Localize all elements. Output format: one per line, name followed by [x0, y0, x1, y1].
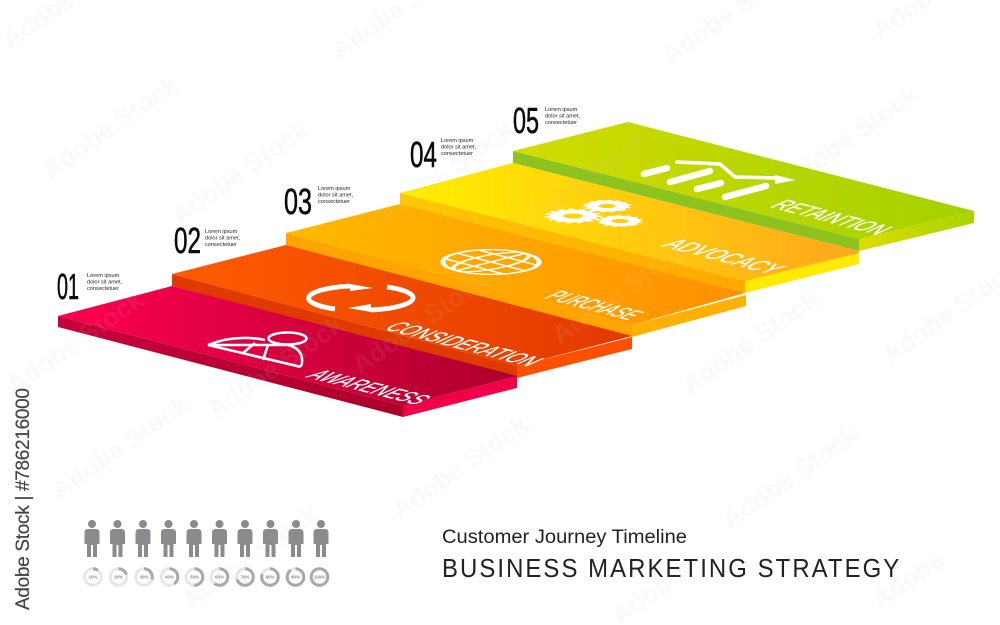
- label: retention: RETAINTION: [763, 197, 900, 238]
- label: purchase: PURCHASE: [537, 288, 651, 323]
- number 01 with note: dolor sit amet,: [87, 280, 123, 286]
- number 05 with note: 05: [513, 100, 539, 141]
- watermark pattern: Adobe Stock: [176, 499, 324, 615]
- watermark pattern: Adobe Stock: [46, 389, 194, 505]
- stock id vertical caption: Adobe Stock | #786216000: [13, 388, 34, 610]
- percentage donut row: 100%: [314, 575, 325, 580]
- percentage donut row: 90%: [291, 575, 300, 580]
- watermark pattern: Adobe Stock: [346, 264, 494, 380]
- percentage donut row: 70%: [240, 575, 250, 580]
- number 03 with note: 03: [284, 181, 312, 222]
- watermark pattern: Adobe Stock: [546, 234, 694, 350]
- icon: rising chart: [644, 162, 796, 197]
- number 05 with note: [513, 100, 581, 141]
- percentage donut row: 40%: [165, 575, 174, 580]
- number 02 with note: 02: [174, 220, 201, 261]
- step 4: advocacy: [400, 163, 859, 293]
- watermark pattern: Adobe Stock: [166, 114, 314, 230]
- watermark pattern: Adobe: [866, 544, 950, 615]
- icon: cycle arrows: [309, 284, 413, 312]
- label: consideration: CONSIDERATION: [377, 319, 551, 369]
- percentage donut row: 80%: [265, 575, 275, 580]
- number 04 with note: dolor sit amet,: [441, 144, 477, 150]
- watermark pattern: Adobe Stock: [201, 309, 349, 425]
- number 01 with note: [57, 266, 123, 307]
- percentage donut row: 30%: [139, 575, 149, 580]
- number 01 with note: Lorem ipsum: [87, 273, 120, 279]
- number 02 with note: consectetuer: [205, 242, 237, 248]
- subtitle: Customer Journey Timeline: [442, 527, 687, 548]
- number 01 with note: 01: [57, 266, 79, 307]
- number 02 with note: Lorem ipsum: [205, 229, 238, 235]
- icon: globe: [423, 244, 559, 280]
- people icon row: [84, 520, 328, 557]
- number 04 with note: Lorem ipsum: [441, 138, 474, 144]
- percentage donut row: [85, 569, 328, 585]
- number 04 with note: consectetuer: [441, 151, 473, 157]
- watermark pattern: Adobe Stock: [371, 114, 519, 230]
- step 5: retention: [513, 122, 974, 251]
- number 02 with note: [174, 220, 241, 261]
- number 05 with note: dolor sit amet,: [545, 114, 581, 120]
- number 02 with note: dolor sit amet,: [205, 236, 241, 242]
- number 05 with note: consectetuer: [545, 120, 577, 126]
- number 03 with note: Lorem ipsum: [318, 186, 351, 192]
- icon: gears: [537, 198, 648, 228]
- percentage donut row: 60%: [215, 575, 224, 580]
- percentage donut row: 10%: [88, 575, 98, 580]
- main title: BUSINESS MARKETING STRATEGY: [442, 554, 900, 583]
- number 04 with note: [410, 134, 477, 175]
- label: advocacy: ADVOCACY: [655, 236, 793, 277]
- number 04 with note: 04: [410, 134, 437, 175]
- watermark pattern: Adobe Stock: [36, 69, 184, 185]
- watermark pattern: Adobe Stock: [506, 124, 654, 240]
- watermark pattern: Adobe Stock: [716, 419, 864, 535]
- watermark pattern: Adobe Stock: [676, 284, 824, 400]
- watermark pattern: Adobe Stock: [386, 409, 534, 525]
- number 05 with note: Lorem ipsum: [545, 107, 578, 113]
- step 2: consideration: [172, 245, 632, 378]
- number 03 with note: consectetuer: [318, 199, 350, 205]
- percentage donut row: 20%: [114, 575, 123, 580]
- step 3: purchase: [286, 204, 746, 337]
- step 1: awareness: [58, 286, 517, 417]
- icon: person: [208, 332, 306, 366]
- label: awareness: AWARENESS: [299, 367, 439, 407]
- watermark pattern: Adobe Stock: [776, 79, 924, 195]
- watermark pattern: Adobe Stock: [1, 284, 149, 400]
- number 01 with note: consectetuer: [87, 286, 119, 292]
- number 03 with note: [284, 181, 354, 222]
- percentage donut row: 50%: [190, 575, 199, 580]
- number 03 with note: dolor sit amet,: [318, 192, 354, 198]
